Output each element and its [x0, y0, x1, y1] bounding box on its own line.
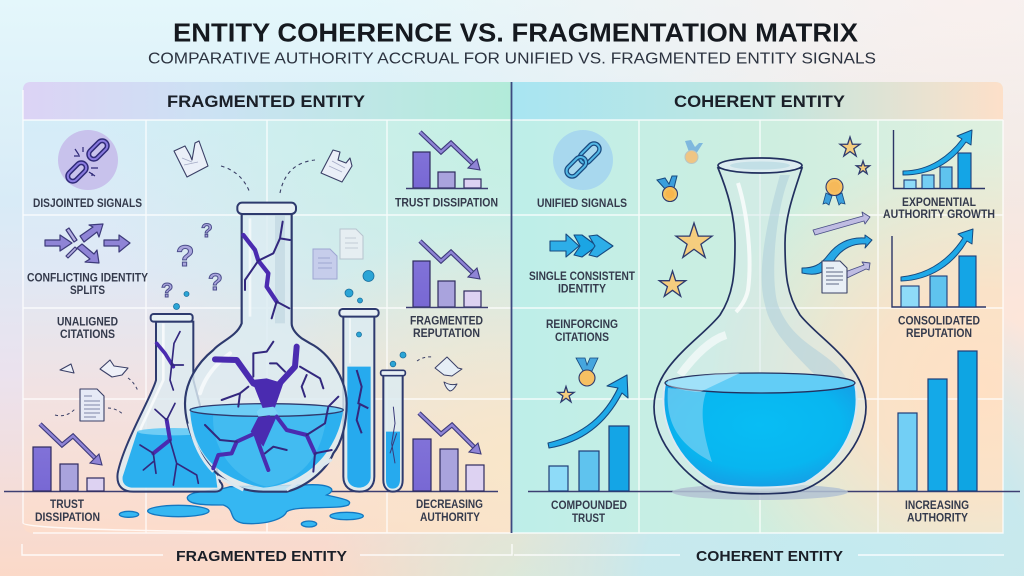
label: increasing authority: AUTHORITY — [907, 512, 968, 524]
icon: broken chain — [58, 130, 118, 190]
label: consolidated reputation: REPUTATION — [906, 328, 972, 340]
label: consolidated reputation — [898, 316, 980, 340]
icon: torn paper top right — [280, 150, 352, 193]
icon: stars and rosette right — [823, 137, 870, 205]
icon: question marks: ? — [208, 269, 223, 296]
icon: question marks: ? — [176, 240, 194, 273]
chart: decreasing authority — [413, 413, 484, 491]
illustration: coherent flask — [654, 158, 866, 500]
icon: unified chain — [553, 130, 613, 190]
center divider — [510, 82, 512, 533]
footer: fragmented entity — [22, 544, 512, 565]
footer: fragmented entity: FRAGMENTED ENTITY — [176, 548, 347, 565]
icon: torn paper top left — [174, 141, 250, 193]
icon: triple arrows — [550, 234, 613, 257]
label: reinforcing citations: CITATIONS — [555, 332, 609, 344]
flask shadow — [672, 484, 848, 500]
label: exponential authority growth — [883, 197, 995, 221]
label: trust dissipation lower left: DISSIPATION — [35, 512, 100, 524]
flask rim — [718, 158, 802, 173]
subtitle: COMPARATIVE AUTHORITY ACCRUAL FOR UNIFIED VS. FRAGMENTED ENTITY SIGNALS — [148, 50, 876, 68]
flask glass — [654, 168, 866, 494]
label: decreasing authority: DECREASING — [416, 499, 483, 511]
left erlenmeyer flask — [117, 314, 222, 492]
test tube small — [381, 370, 405, 492]
chart: consolidated reputation — [892, 229, 986, 307]
icon: medals and stars left — [657, 140, 712, 296]
footer: coherent entity: COHERENT ENTITY — [696, 548, 843, 565]
icon: faded documents — [313, 229, 363, 279]
panel: coherent entity — [511, 82, 1003, 533]
chart: compounded trust — [548, 358, 629, 491]
chart: trust dissipation top right — [406, 132, 488, 188]
label: reinforcing citations — [546, 319, 618, 344]
label: compounded trust — [551, 500, 627, 525]
label: decreasing authority — [416, 499, 483, 524]
illustration: cracked flasks — [117, 203, 405, 527]
label: single consistent identity: IDENTITY — [558, 284, 606, 296]
panel: fragmented entity — [23, 82, 511, 533]
chart: trust dissipation lower left — [33, 424, 104, 491]
label: unaligned citations: CITATIONS — [60, 329, 115, 341]
icon: question marks: ? — [201, 221, 213, 242]
label: disjointed signals: DISJOINTED SIGNALS — [33, 198, 142, 210]
label: exponential authority growth: AUTHORITY GROWTH — [883, 209, 995, 221]
label: unified signals: UNIFIED SIGNALS — [537, 198, 627, 210]
label: fragmented reputation: REPUTATION — [413, 328, 480, 340]
puddle — [119, 485, 363, 527]
ground lines — [4, 490, 1020, 492]
icon: converging arrows with document — [802, 212, 872, 293]
chart: exponential authority growth — [894, 130, 985, 188]
icon: question marks: ? — [161, 280, 173, 302]
label: compounded trust: TRUST — [572, 513, 605, 525]
label: decreasing authority: AUTHORITY — [420, 512, 480, 524]
label: single consistent identity: SINGLE CONSISTENT — [529, 271, 635, 283]
icon: torn paper right — [417, 357, 462, 391]
label: increasing authority — [905, 500, 969, 524]
label: reinforcing citations: REINFORCING — [546, 319, 618, 331]
label: compounded trust: COMPOUNDED — [551, 500, 627, 512]
label: fragmented reputation — [410, 316, 483, 340]
label: conflicting identity splits: SPLITS — [70, 285, 105, 297]
icon: scattered papers lower left — [55, 360, 138, 421]
icon: bubbles — [174, 270, 406, 367]
panel heading: fragmented entity: FRAGMENTED ENTITY — [167, 92, 366, 111]
chart: increasing authority — [898, 351, 977, 491]
test tube large — [339, 309, 379, 492]
title: ENTITY COHERENCE VS. FRAGMENTATION MATRIX — [173, 18, 859, 48]
label: trust dissipation lower left — [35, 499, 100, 524]
label: fragmented reputation: FRAGMENTED — [410, 316, 483, 328]
main round flask — [185, 203, 347, 492]
label: unaligned citations: UNALIGNED — [57, 316, 118, 328]
label: trust dissipation lower left: TRUST — [50, 499, 84, 511]
label: conflicting identity splits — [27, 272, 148, 297]
label: exponential authority growth: EXPONENTIAL — [902, 197, 976, 209]
panel heading: coherent entity: COHERENT ENTITY — [674, 92, 846, 111]
flask liquid — [663, 383, 857, 488]
label: consolidated reputation: CONSOLIDATED — [898, 316, 980, 328]
label: increasing authority: INCREASING — [905, 500, 969, 512]
label: conflicting identity splits: CONFLICTING IDENTITY — [27, 272, 148, 284]
chart: fragmented reputation — [406, 241, 488, 308]
label: trust dissipation top right: TRUST DISSIPATION — [395, 198, 498, 210]
icon: conflicting arrows — [45, 224, 130, 263]
label: unaligned citations — [57, 316, 118, 341]
label: single consistent identity — [529, 271, 635, 296]
icon: question marks — [161, 221, 223, 302]
